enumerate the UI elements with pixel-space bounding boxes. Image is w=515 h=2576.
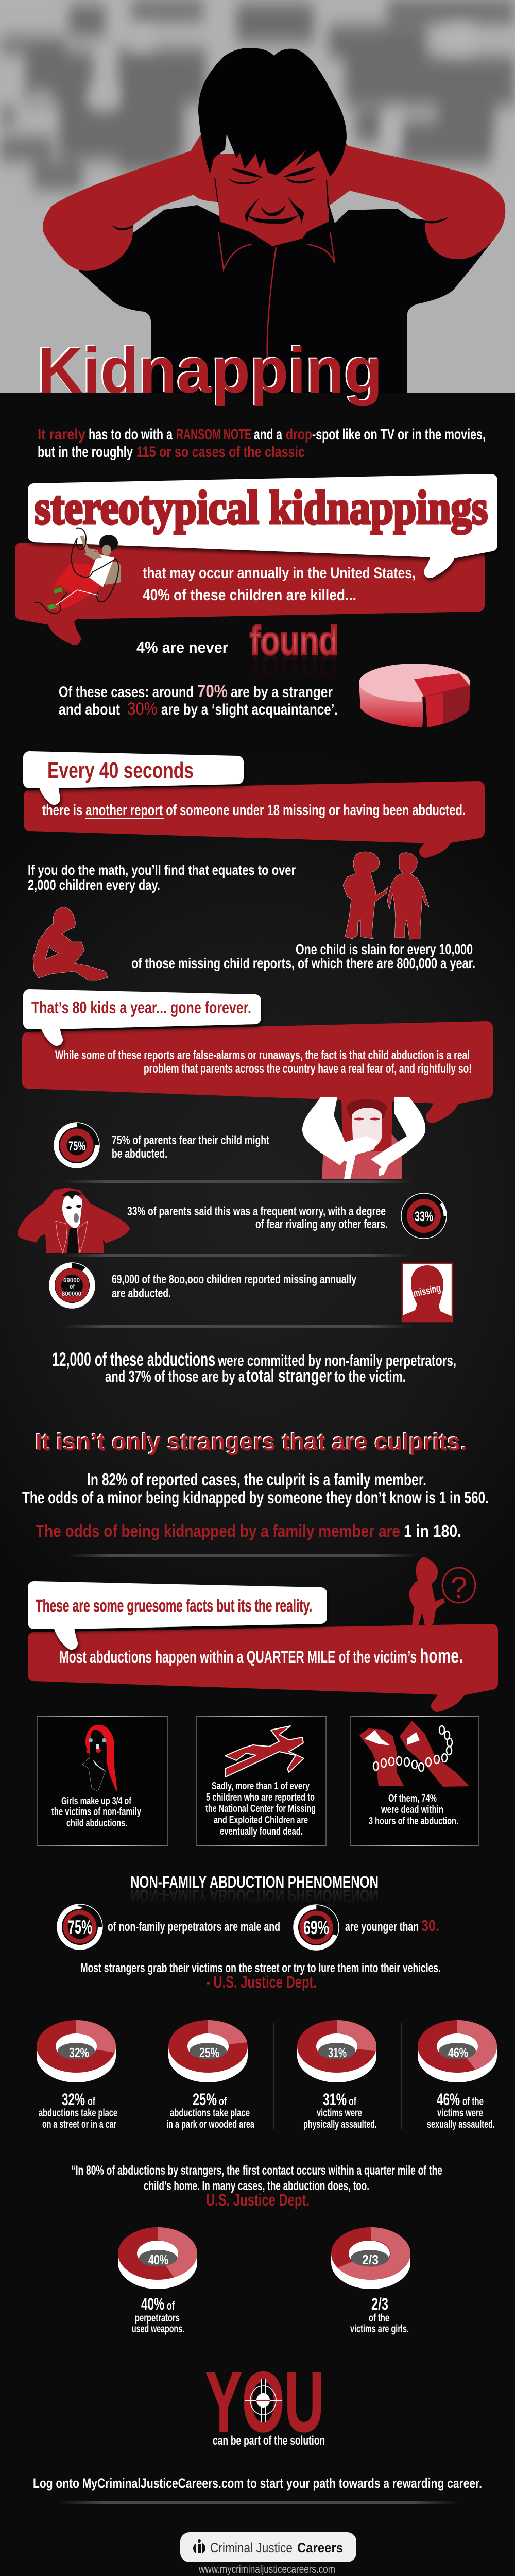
icon: screaming parent bbox=[18, 1188, 130, 1253]
younger than text: 30. bbox=[421, 1917, 439, 1935]
intro text: but in the roughly bbox=[38, 444, 133, 461]
icon: missing person poster: missing bbox=[412, 1282, 442, 1299]
stat: 32% street or car: 32% bbox=[62, 2090, 85, 2109]
title: Kidnapping: Kidnapping bbox=[36, 334, 381, 405]
4% are never found bbox=[136, 618, 341, 692]
icon: chained hands bbox=[359, 1721, 470, 1787]
quote bbox=[71, 2163, 442, 2209]
icon: logo mark bbox=[193, 2539, 205, 2553]
intro text: RANSOM NOTE bbox=[176, 426, 251, 443]
caption: Of them, 74% bbox=[388, 1793, 437, 1804]
panel: found dead bbox=[196, 1716, 327, 1846]
parents fear text bbox=[112, 1133, 269, 1161]
cases text: Of these cases: around bbox=[59, 684, 194, 701]
stat: 46% sexually assaulted: of the bbox=[462, 2095, 484, 2108]
red arms and face bbox=[43, 135, 221, 271]
heading: it isn't only strangers: It isn’t only strangers that are culprits. bbox=[36, 1429, 467, 1455]
icon: crosshair bbox=[245, 2379, 282, 2422]
caption: Sadly, more than 1 of every bbox=[212, 1781, 310, 1792]
stat: 2/3 girls: of the bbox=[369, 2312, 389, 2324]
stat: 31% physically assaulted: victims were bbox=[317, 2107, 362, 2119]
red speech bubble bbox=[34, 1630, 492, 1706]
stat: 32% street or car bbox=[39, 2090, 117, 2130]
donut: 69% younger bbox=[290, 1901, 342, 1954]
stat: 40% used weapons bbox=[132, 2295, 184, 2335]
cases text: are by a ‘slight acquaintance’. bbox=[161, 701, 338, 718]
math text: 2,000 children every day. bbox=[28, 877, 160, 893]
stat: 2/3 girls bbox=[350, 2295, 409, 2335]
3D donut: 31% bbox=[297, 2020, 376, 2082]
stat: 32% street or car: on a street or in a car bbox=[42, 2119, 116, 2130]
cases text: are by a stranger bbox=[231, 684, 333, 701]
icon: child with question mark: ? bbox=[451, 1571, 467, 1604]
caption: the National Center for Missing bbox=[205, 1803, 316, 1815]
stat: 46% sexually assaulted: 46% bbox=[437, 2090, 460, 2109]
donut: 69% younger: 69% bbox=[303, 1917, 329, 1938]
panel: dead within 3 hours bbox=[350, 1716, 479, 1846]
parents fear text: 75% of parents fear their child might bbox=[112, 1133, 269, 1147]
caption: and Exploited Children are bbox=[214, 1815, 308, 1826]
stat: 25% park or wooded: in a park or wooded area bbox=[166, 2119, 254, 2130]
non-family perpetrators text: total stranger bbox=[246, 1366, 332, 1386]
logo: Criminal Justice Careers bbox=[180, 2532, 356, 2562]
donut: 75% male bbox=[57, 1904, 102, 1950]
stat: 32% street or car: abductions take place bbox=[39, 2107, 117, 2119]
heading: These are some gruesome facts but its the reality. bbox=[36, 1596, 312, 1615]
caption bbox=[205, 1781, 316, 1837]
non-family perpetrators text: 12,000 of these abductions bbox=[52, 1349, 215, 1370]
cases text bbox=[59, 682, 338, 719]
website url: www.mycriminaljusticecareers.com bbox=[198, 2563, 335, 2575]
stat: 40% used weapons: of bbox=[167, 2299, 175, 2312]
family member odds bbox=[22, 1470, 489, 1540]
red speech bubble bbox=[28, 1027, 487, 1117]
caption: 5 children who are reported to bbox=[206, 1792, 315, 1803]
YOU target: YOU bbox=[205, 2354, 324, 2449]
stat: 31% physically assaulted: physically assaulted. bbox=[303, 2119, 377, 2130]
donut: 75% of parents: 75% bbox=[68, 1139, 85, 1154]
panel: every 40 seconds bbox=[29, 757, 478, 852]
family member odds: 1 in 180. bbox=[404, 1521, 461, 1540]
quote: U.S. Justice Dept. bbox=[206, 2191, 310, 2209]
intro text: has to do with a bbox=[89, 426, 173, 443]
cases text: 30% bbox=[127, 699, 158, 719]
intro text bbox=[38, 426, 486, 461]
abducted text: are abducted. bbox=[112, 1286, 171, 1300]
heading: non-family abduction phenomenon bbox=[130, 1873, 379, 1905]
stat: 32% street or car: of bbox=[88, 2095, 95, 2108]
black shirt bbox=[76, 205, 502, 393]
YOU target bbox=[205, 2354, 325, 2449]
stat: 40% used weapons: perpetrators bbox=[135, 2312, 180, 2324]
donut: 69000 of 800000: 69000 bbox=[63, 1277, 80, 1284]
icon: sitting child silhouette bbox=[33, 907, 108, 980]
caption: eventually found dead. bbox=[220, 1826, 303, 1837]
white speech bubble bbox=[29, 757, 237, 799]
icon: missing person poster bbox=[402, 1263, 452, 1321]
pie chart: 70 / 30 bbox=[359, 664, 470, 729]
caption: were dead within bbox=[381, 1804, 443, 1816]
3D donut: 46% bbox=[418, 2020, 497, 2082]
heading: non-family abduction phenomenon: NON-FAMILY ABDUCTION PHENOMENON bbox=[130, 1886, 379, 1905]
stat: 2/3 girls: victims are girls. bbox=[350, 2323, 409, 2335]
caption bbox=[369, 1793, 458, 1827]
stat: 25% park or wooded: of bbox=[219, 2095, 227, 2108]
bubble text: that may occur annually in the United States, bbox=[143, 565, 416, 582]
icon: child with question mark bbox=[409, 1557, 475, 1625]
quote: child’s home. In many cases, the abduction does, too. bbox=[144, 2179, 369, 2193]
3D donut: 2/3 bbox=[331, 2227, 410, 2289]
donut: 33%: 33% bbox=[415, 1209, 433, 1224]
caption: Girls make up 3/4 of bbox=[61, 1795, 131, 1807]
red speech bubble bbox=[21, 549, 478, 639]
heading: That’s 80 kids a year... gone forever. bbox=[31, 998, 251, 1017]
background glow bbox=[0, 747, 515, 1674]
donut: 33% bbox=[394, 1187, 453, 1245]
white speech bubble bbox=[34, 480, 491, 572]
3D donut: 40% bbox=[118, 2227, 197, 2289]
abducted text: 69,000 of the 8oo,ooo children reported missing annually bbox=[112, 1273, 356, 1286]
3D donut: 31%: 31% bbox=[328, 2045, 347, 2060]
panel: stereotypical kidnappings bbox=[21, 480, 491, 639]
parents worry text bbox=[127, 1205, 388, 1231]
strangers text bbox=[80, 1961, 441, 1991]
3D donut: 40%: 40% bbox=[148, 2252, 168, 2267]
icon: boy tied with rope bbox=[35, 528, 121, 613]
logo: Criminal Justice Careers: Careers bbox=[297, 2540, 343, 2555]
4% are never found: found bbox=[250, 618, 338, 663]
title: Kidnapping: Kidnapping bbox=[38, 335, 383, 406]
heading: Every 40 seconds bbox=[47, 758, 194, 783]
stat: 25% park or wooded: 25% bbox=[193, 2090, 217, 2109]
logo: Criminal Justice Careers: Criminal Justice bbox=[210, 2540, 293, 2555]
intro text: drop bbox=[286, 426, 312, 443]
3D donut: 25% bbox=[168, 2020, 248, 2082]
stat: 46% sexually assaulted: victims were bbox=[437, 2107, 483, 2119]
parents fear text: be abducted. bbox=[112, 1147, 167, 1161]
heading: non-family abduction phenomenon: NON-FAMILY ABDUCTION PHENOMENON bbox=[130, 1873, 379, 1891]
icon: girl bbox=[82, 1725, 117, 1791]
stat: 25% park or wooded bbox=[166, 2090, 254, 2130]
donut: 69000 of 800000: of bbox=[70, 1283, 75, 1290]
icon: child with hand over mouth bbox=[302, 1097, 425, 1179]
stat: 40% used weapons: used weapons. bbox=[132, 2323, 184, 2335]
panel: stereotypical kidnappings: 40% of these children are killed... bbox=[143, 586, 356, 604]
3D donut: 2/3: 2/3 bbox=[362, 2252, 379, 2267]
family member odds: The odds of being kidnapped by a family member are bbox=[36, 1521, 400, 1540]
stat: 31% physically assaulted: of bbox=[349, 2095, 356, 2108]
slain text bbox=[131, 941, 475, 971]
donut: 75% of parents bbox=[54, 1123, 99, 1168]
caption: 3 hours of the abduction. bbox=[369, 1816, 458, 1827]
4% are never found: 4% are never bbox=[136, 638, 228, 656]
stat: 40% used weapons: 40% bbox=[141, 2295, 164, 2313]
cases text: 70% bbox=[197, 682, 228, 701]
caption: the victims of non-family bbox=[52, 1806, 142, 1818]
red speech bubble bbox=[30, 787, 478, 852]
intro text: and a bbox=[254, 426, 282, 443]
heading: it isn't only strangers: It isn’t only strangers that are culprits. bbox=[35, 1428, 466, 1454]
male text: of non-family perpetrators are male and bbox=[108, 1920, 280, 1934]
donut: 75% male: 75% bbox=[68, 1917, 92, 1938]
non-family perpetrators text: and 37% of those are by a bbox=[105, 1367, 245, 1385]
panel: girls make up 3/4 bbox=[37, 1716, 168, 1846]
white speech bubble bbox=[34, 1587, 321, 1643]
collar and tie lines bbox=[218, 232, 335, 367]
panel: gruesome facts: home. bbox=[420, 1646, 463, 1667]
strangers text: - U.S. Justice Dept. bbox=[206, 1973, 317, 1991]
cases text: and about bbox=[59, 701, 120, 718]
donut: 69000 of 800000 bbox=[44, 1258, 100, 1313]
3D donut: 46%: 46% bbox=[448, 2045, 468, 2060]
stat: 31% physically assaulted bbox=[303, 2090, 377, 2130]
panel: gruesome facts bbox=[34, 1587, 492, 1706]
stat: 31% physically assaulted: 31% bbox=[323, 2090, 347, 2109]
intro text: 115 or so cases of the classic bbox=[136, 444, 305, 461]
icon: two children silhouette bbox=[343, 852, 429, 939]
4% are never found: found bbox=[250, 647, 338, 692]
stat: 46% sexually assaulted bbox=[427, 2090, 495, 2130]
parents worry text: of fear rivaling any other fears. bbox=[255, 1217, 388, 1231]
YOU target: can be part of the solution bbox=[213, 2434, 325, 2448]
panel: that's 80 kids a year bbox=[28, 995, 487, 1117]
stat: 2/3 girls: 2/3 bbox=[371, 2295, 388, 2313]
caption bbox=[52, 1795, 142, 1829]
stat: 25% park or wooded: abductions take place bbox=[170, 2107, 250, 2119]
math text bbox=[28, 862, 296, 893]
hair bbox=[198, 48, 347, 177]
hero illustration: boy covering his ears bbox=[0, 0, 515, 393]
abducted text bbox=[112, 1273, 356, 1300]
3D donut: 32%: 32% bbox=[69, 2045, 89, 2060]
non-family perpetrators text: to the victim. bbox=[334, 1367, 406, 1385]
white speech bubble bbox=[29, 995, 255, 1040]
3D donut: 32% bbox=[37, 2020, 116, 2082]
3D donut: 25%: 25% bbox=[199, 2045, 219, 2060]
donut: 69000 of 800000: 800000 bbox=[62, 1290, 81, 1297]
parents worry text: 33% of parents said this was a frequent worry, with a degree bbox=[127, 1205, 386, 1218]
facial features bbox=[111, 167, 449, 230]
non-family perpetrators text bbox=[52, 1349, 456, 1386]
caption: child abductions. bbox=[66, 1818, 127, 1829]
icon: chalk body outline bbox=[225, 1726, 304, 1777]
younger than text: are younger than bbox=[345, 1920, 419, 1934]
intro text: It rarely bbox=[38, 426, 85, 443]
math text: If you do the math, you’ll find that equates to over bbox=[28, 862, 296, 878]
